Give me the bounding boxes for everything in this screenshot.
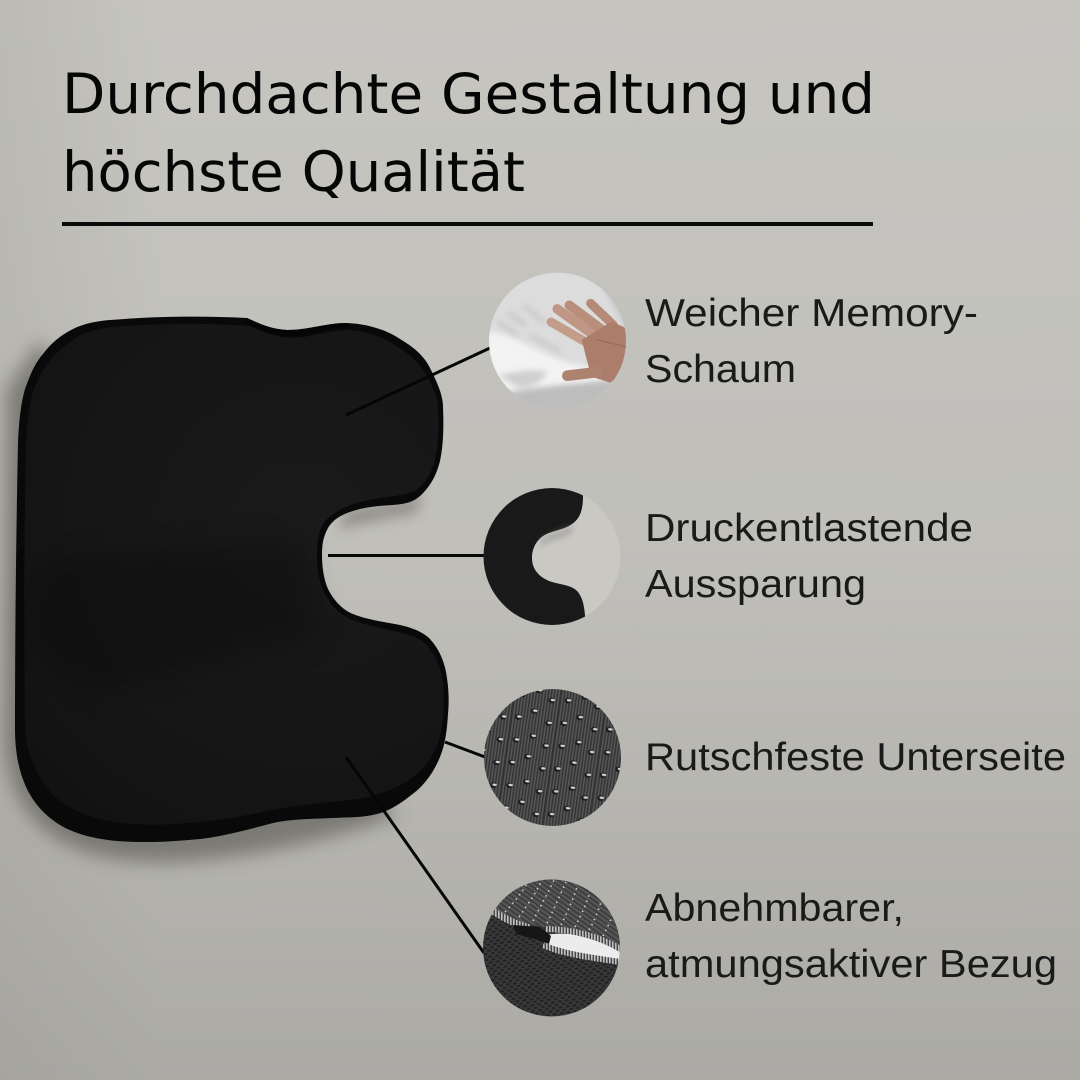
label: cut-out — [645, 507, 973, 606]
title: Durchdachte Gestaltung und — [62, 62, 875, 126]
leader line: cut-out — [328, 554, 484, 557]
label: cut-out: Aussparung — [645, 563, 866, 606]
zipper slider — [513, 925, 551, 944]
label: memory foam — [645, 292, 978, 391]
icon: zipper cover — [483, 880, 620, 1016]
leader line: non-slip underside — [445, 742, 485, 757]
label: removable cover: atmungsaktiver Bezug — [645, 943, 1057, 986]
label: cut-out: Druckentlastende — [645, 507, 973, 550]
label: memory foam: Schaum — [645, 348, 796, 391]
cushion product photo — [4, 317, 449, 862]
icon: non-slip fabric — [484, 689, 621, 826]
icon: cushion cut-out — [484, 488, 620, 625]
icon: memory foam with hand — [489, 272, 626, 394]
label: memory foam: Weicher Memory- — [645, 292, 978, 335]
leader line: removable cover — [346, 757, 484, 953]
title — [62, 62, 875, 204]
label: removable cover — [645, 887, 1057, 986]
title underline — [62, 222, 873, 226]
leader line: memory foam — [346, 348, 490, 415]
label: non-slip underside: Rutschfeste Unterseite — [645, 736, 1066, 779]
title: höchste Qualität — [62, 140, 525, 204]
hand — [551, 303, 627, 383]
label: removable cover: Abnehmbarer, — [645, 887, 904, 930]
